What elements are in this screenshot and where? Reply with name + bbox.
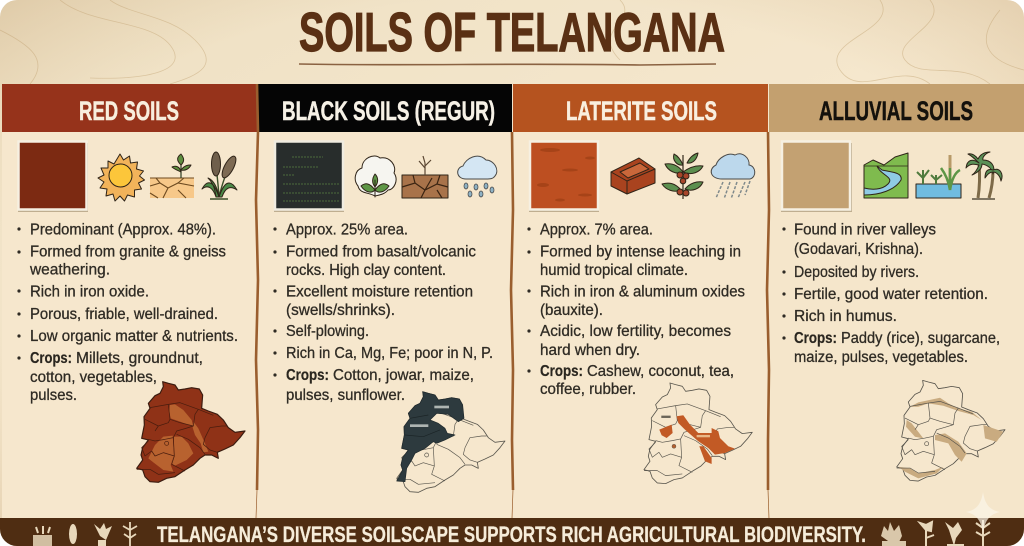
- soil facts: red: weathering.: [29, 262, 110, 278]
- panel: black soils: [258, 84, 512, 518]
- soil facts: black: Rich in Ca, Mg, Fe; poor in N, P.: [286, 345, 493, 362]
- icon: paddy and sugarcane: [916, 155, 961, 198]
- soil facts: black: Self-plowing.: [286, 323, 369, 340]
- soil facts: red: Porous, friable, well-drained.: [30, 306, 218, 323]
- soil facts: black: rocks. High clay content.: [286, 262, 446, 279]
- soil facts: red: Formed from granite & gneiss: [30, 244, 226, 260]
- soil facts: red: [17, 222, 238, 404]
- header: black soils: [258, 84, 512, 132]
- soil facts: red: Millets, groundnut,: [76, 350, 203, 367]
- soil facts: red: Predominant (Approx. 48%).: [30, 222, 216, 238]
- footer icons: right: [881, 520, 990, 546]
- soil facts: laterite: Cashew, coconut, tea,: [587, 363, 734, 380]
- header: black soils: BLACK SOILS (REGUR): [282, 96, 495, 126]
- soil facts: laterite: hard when dry.: [540, 342, 640, 359]
- soil swatch: black: [274, 142, 344, 212]
- soil facts: alluvial: Rich in humus.: [794, 308, 897, 325]
- soil swatch: red: [18, 142, 88, 212]
- soil facts: alluvial: Paddy (rice), sugarcane,: [841, 330, 1000, 347]
- map: red soil distribution: [137, 382, 245, 482]
- soil facts: laterite: Acidic, low fertility, becomes: [540, 323, 731, 340]
- soil swatch: alluvial: [781, 142, 852, 212]
- title: SOILS OF TELANGANA: [299, 1, 725, 63]
- soil facts: black: Cotton, jowar, maize,: [333, 367, 474, 384]
- soil facts: alluvial: (Godavari, Krishna).: [794, 241, 923, 258]
- header: red soils: RED SOILS: [79, 96, 179, 126]
- map: laterite soil distribution: [644, 383, 752, 484]
- icon: cotton boll: [355, 156, 396, 197]
- icon: millet plant: [202, 152, 239, 199]
- soil facts: alluvial: Deposited by rivers.: [794, 264, 919, 281]
- soil facts: black: [273, 222, 493, 404]
- soil facts: laterite: (bauxite).: [540, 302, 603, 319]
- soil facts: black: Approx. 25% area.: [286, 222, 408, 238]
- icon: plant on cracked soil: [150, 154, 194, 198]
- column dividers: [256, 84, 769, 518]
- soil facts: laterite: humid tropical climate.: [540, 262, 688, 279]
- soil facts: black: (swells/shrinks).: [286, 302, 395, 319]
- soil facts: laterite: Approx. 7% area.: [540, 222, 653, 238]
- soil swatch: laterite: [529, 142, 599, 212]
- soil facts: black: Formed from basalt/volcanic: [286, 244, 476, 260]
- icon: river valley: [864, 153, 908, 198]
- header: laterite soils: LATERITE SOILS: [566, 96, 717, 126]
- soil facts: black: Crops:: [286, 367, 329, 384]
- soil facts: laterite: Crops:: [540, 363, 583, 380]
- soil facts: red: Crops:: [30, 350, 72, 367]
- icon: sun: [98, 154, 144, 201]
- icon: cracked soil: [402, 156, 448, 198]
- soil facts: red: Rich in iron oxide.: [30, 284, 149, 300]
- header: red soils: [2, 84, 257, 132]
- icon: palm trees: [966, 152, 1002, 199]
- icon: coffee plant: [662, 153, 703, 199]
- header: laterite soils: [513, 84, 768, 132]
- footer icons: left: [33, 522, 137, 546]
- soil facts: alluvial: maize, pulses, vegetables.: [794, 349, 968, 366]
- soil facts: alluvial: Fertile, good water retention.: [794, 286, 988, 303]
- soil facts: alluvial: Found in river valleys: [794, 222, 936, 238]
- panel: alluvial soils: [769, 84, 1024, 518]
- soil facts: laterite: coffee, rubber.: [540, 381, 636, 398]
- soil facts: alluvial: Crops:: [794, 330, 837, 347]
- soil facts: laterite: [527, 222, 745, 398]
- soil facts: laterite: Formed by intense leaching in: [540, 244, 741, 260]
- icon: laterite brick: [611, 158, 655, 194]
- footer banner: [0, 518, 1024, 546]
- soil facts: black: pulses, sunflower.: [286, 387, 405, 404]
- soil facts: laterite: Rich in iron & aluminum oxides: [540, 284, 745, 300]
- icon: heavy rain cloud: [711, 154, 755, 199]
- soil facts: red: cotton, vegetables,: [30, 369, 157, 386]
- sparkle watermark: [966, 492, 1000, 533]
- icon: rain cloud: [458, 156, 497, 197]
- soil facts: red: pulses.: [30, 387, 77, 404]
- header: alluvial soils: [769, 84, 1024, 132]
- soil facts: alluvial: [782, 222, 1000, 366]
- panel: red soils: [2, 84, 257, 518]
- map: black soil distribution: [397, 392, 505, 492]
- panel: laterite soils: [513, 84, 768, 518]
- map: alluvial soil distribution: [897, 380, 1005, 481]
- soil facts: red: Low organic matter & nutrients.: [30, 328, 238, 345]
- soil facts: black: Excellent moisture retention: [286, 284, 473, 300]
